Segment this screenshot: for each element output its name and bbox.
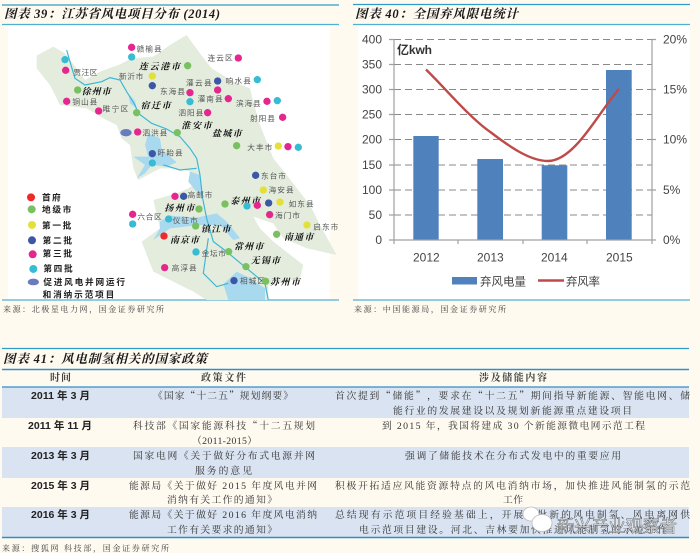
city labels: 镇江市 bbox=[201, 224, 233, 234]
combo chart bbox=[362, 32, 687, 288]
left axis labels: 150 bbox=[362, 158, 382, 172]
place labels: 铜山县 bbox=[72, 96, 98, 106]
row: 2013-03: 强调了储能技术在分布式发电中的重要应用 bbox=[405, 449, 621, 462]
place labels: 连云区 bbox=[208, 52, 233, 62]
source note: figure 40: 来源：中国能源局，国金证券研究所 bbox=[354, 304, 506, 315]
place labels: 贾汪区 bbox=[73, 68, 98, 77]
place labels: 海门市 bbox=[275, 210, 300, 220]
place labels: 灌南县 bbox=[198, 94, 223, 104]
x axis labels: 2012 bbox=[413, 250, 440, 264]
bars: curtailed wind power bbox=[413, 70, 632, 240]
heading: figure 40: 图表 40：全国弃风限电统计 bbox=[355, 7, 519, 21]
place labels: 如东县 bbox=[289, 198, 314, 208]
unit label: 亿kwh bbox=[397, 42, 432, 57]
table header: 涉及储能内容 bbox=[479, 371, 547, 384]
city labels: 淮安市 bbox=[181, 121, 214, 131]
place labels: 启东市 bbox=[313, 222, 339, 232]
map of Jiangsu bbox=[27, 35, 339, 300]
row: 2011-11 bbox=[28, 418, 645, 447]
x axis labels: 2014 bbox=[541, 250, 568, 264]
city labels: 无锡市 bbox=[251, 255, 282, 265]
place labels: 滨海县 bbox=[236, 98, 261, 108]
right axis labels: 5% bbox=[663, 183, 681, 197]
map legend bbox=[27, 192, 125, 300]
map legend: 第一批 bbox=[42, 220, 72, 231]
left axis labels: 400 bbox=[362, 32, 382, 46]
row: 2011-03: 能行业的发展建设以及规划新能源重点建设项目 bbox=[393, 404, 632, 417]
city labels: 宿迁市 bbox=[141, 100, 173, 110]
row: 2013-03 bbox=[31, 449, 621, 477]
place labels: 泗阳县 bbox=[178, 108, 204, 117]
place labels: 大丰市 bbox=[247, 142, 273, 152]
left axis labels: 250 bbox=[362, 108, 382, 122]
map legend: 第三批 bbox=[43, 247, 72, 258]
row: 2011-11: 2011 年 11 月 bbox=[28, 419, 92, 432]
left axis labels: 350 bbox=[362, 58, 382, 72]
row: 2011-03: 《国家“十二五”规划纲要》 bbox=[153, 388, 293, 402]
table row bands bbox=[2, 387, 689, 537]
place labels: 盱眙县 bbox=[158, 147, 183, 157]
place labels: 睢宁区 bbox=[103, 104, 129, 114]
city labels: 泰州市 bbox=[230, 196, 262, 206]
city labels: 连云港市 bbox=[139, 61, 182, 71]
x axis labels: 2015 bbox=[606, 250, 633, 264]
city labels: 扬州市 bbox=[164, 203, 196, 213]
row: 2016-03: 能源局《关于做好 2016 年度风电消纳 bbox=[129, 508, 317, 521]
place labels: 响水县 bbox=[226, 75, 251, 85]
place labels: 金坛市 bbox=[202, 248, 226, 258]
row: 2015-03: 消纳有关工作的通知》 bbox=[167, 493, 277, 506]
place labels: 灌云县 bbox=[186, 77, 212, 87]
left axis labels: 300 bbox=[362, 82, 382, 96]
row: 2016-03: 工作有关要求的通知》 bbox=[167, 523, 277, 536]
source note: figure 41: 来源：搜狐网 科技部，国金证券研究所 bbox=[2, 543, 169, 553]
place labels bbox=[72, 43, 339, 285]
place labels: 六合区 bbox=[137, 212, 162, 222]
city labels: 南京市 bbox=[170, 235, 201, 245]
table header: 时间 bbox=[50, 371, 71, 384]
row: 2011-03 bbox=[31, 388, 690, 417]
source note: figure 39: 来源：北极星电力网，国金证券研究所 bbox=[3, 304, 164, 315]
place labels: 射阳县 bbox=[250, 113, 275, 123]
heading: figure 39: 图表 39：江苏省风电项目分布 (2014) bbox=[4, 7, 220, 21]
row: 2016-03: 2016 年 3 月 bbox=[31, 508, 90, 521]
row: 2015-03 bbox=[31, 479, 690, 506]
place labels: 高淳县 bbox=[172, 263, 197, 273]
rivers and lakes bbox=[128, 93, 283, 300]
row: 2015-03: 2015 年 3 月 bbox=[31, 479, 90, 492]
right axis labels bbox=[663, 32, 687, 247]
row: 2013-03: 服务的意见 bbox=[195, 464, 252, 477]
x axis labels: 2013 bbox=[477, 250, 504, 264]
city labels: 徐州市 bbox=[82, 86, 113, 96]
left axis labels bbox=[362, 32, 382, 247]
table header: 政策文件 bbox=[201, 371, 246, 384]
map legend: 和消纳示范项目 bbox=[43, 289, 114, 300]
right axis labels: 0% bbox=[663, 233, 681, 247]
map legend: 第二批 bbox=[43, 235, 72, 246]
left axis labels: 100 bbox=[362, 183, 382, 197]
map legend: 地级市 bbox=[42, 204, 72, 215]
row: 2013-03: 2013 年 3 月 bbox=[31, 449, 90, 462]
project markers bbox=[61, 44, 311, 285]
left axis labels: 50 bbox=[369, 208, 382, 222]
place labels: 赣榆县 bbox=[137, 43, 162, 53]
place labels: 仪征市 bbox=[173, 215, 198, 225]
row: 2015-03: 积极开拓适应风能资源特点的风电消纳市场，加快推进风能制氢的示范 bbox=[335, 479, 690, 492]
line: curtailment rate bbox=[426, 70, 619, 161]
place labels: 相城区 bbox=[240, 275, 265, 285]
map legend: 第四批 bbox=[43, 263, 73, 274]
panel: figure 39 Jiangsu wind project map bbox=[2, 5, 339, 315]
place labels: 海安县 bbox=[269, 185, 294, 195]
place labels: 泗洪县 bbox=[142, 127, 168, 137]
chart legend: 弃风电量 bbox=[480, 274, 526, 288]
row: 2013-03: 国家电网《关于做好分布式电源并网 bbox=[133, 449, 315, 462]
map legend: 首府 bbox=[42, 192, 61, 203]
row: 2011-11: 科技部《国家能源科技“十二五规划 bbox=[133, 418, 315, 432]
row: 2016-03 bbox=[31, 508, 690, 536]
row: 2016-03: 电示范项目建设。河北、吉林要加快推进风能制氢的示范工作 bbox=[359, 523, 667, 536]
row: 2011-11: （2011-2015） bbox=[192, 435, 257, 447]
panel: figure 40 curtailment chart bbox=[353, 4, 690, 315]
place labels: 东台市 bbox=[261, 171, 286, 181]
place labels: 高邮市 bbox=[188, 190, 213, 200]
panel: figure 41 policy table bbox=[2, 348, 690, 553]
place labels: 新沂市 bbox=[119, 71, 144, 81]
row: 2011-03: 2011 年 3 月 bbox=[31, 389, 90, 402]
table header bbox=[50, 371, 547, 384]
left axis labels: 200 bbox=[362, 132, 382, 146]
watermark: WeChat account: 新兴产业观察者 bbox=[557, 517, 677, 536]
axes bbox=[389, 40, 656, 244]
right axis labels: 20% bbox=[663, 32, 687, 46]
icon: chat bubbles bbox=[523, 507, 552, 532]
row: 2011-03: 首次提到“储能”，要求在“十二五”期间指导新能源、智能电网、储 bbox=[335, 388, 690, 402]
map legend: 促进风电并网运行 bbox=[43, 276, 125, 287]
city labels: 常州市 bbox=[234, 241, 265, 251]
left axis labels: 0 bbox=[375, 233, 382, 247]
chart legend bbox=[452, 274, 600, 288]
watermark: WeChat account bbox=[523, 507, 677, 536]
chart legend: 弃风率 bbox=[566, 274, 600, 288]
row: 2016-03: 总结现有示范项目经验基础上，开展一批新的风电制氢、风电离网供 bbox=[335, 508, 690, 521]
city labels: 盐城市 bbox=[212, 128, 244, 138]
row: 2015-03: 工作 bbox=[503, 493, 523, 506]
row: 2015-03: 能源局《关于做好 2015 年度风电并网 bbox=[129, 479, 317, 492]
right axis labels: 15% bbox=[663, 82, 687, 96]
province land area bbox=[37, 35, 337, 300]
x axis labels bbox=[413, 250, 633, 264]
place labels: 东海县 bbox=[160, 86, 185, 96]
row: 2011-11: 到 2015 年，我国将建成 30 个新能源微电网示范工程 bbox=[382, 419, 645, 432]
heading: figure 41: 图表 41：风电制氢相关的国家政策 bbox=[3, 352, 209, 366]
city labels: 南通市 bbox=[284, 232, 315, 242]
right axis labels: 10% bbox=[663, 132, 687, 146]
city labels: 苏州市 bbox=[270, 277, 302, 287]
city labels bbox=[82, 61, 315, 287]
